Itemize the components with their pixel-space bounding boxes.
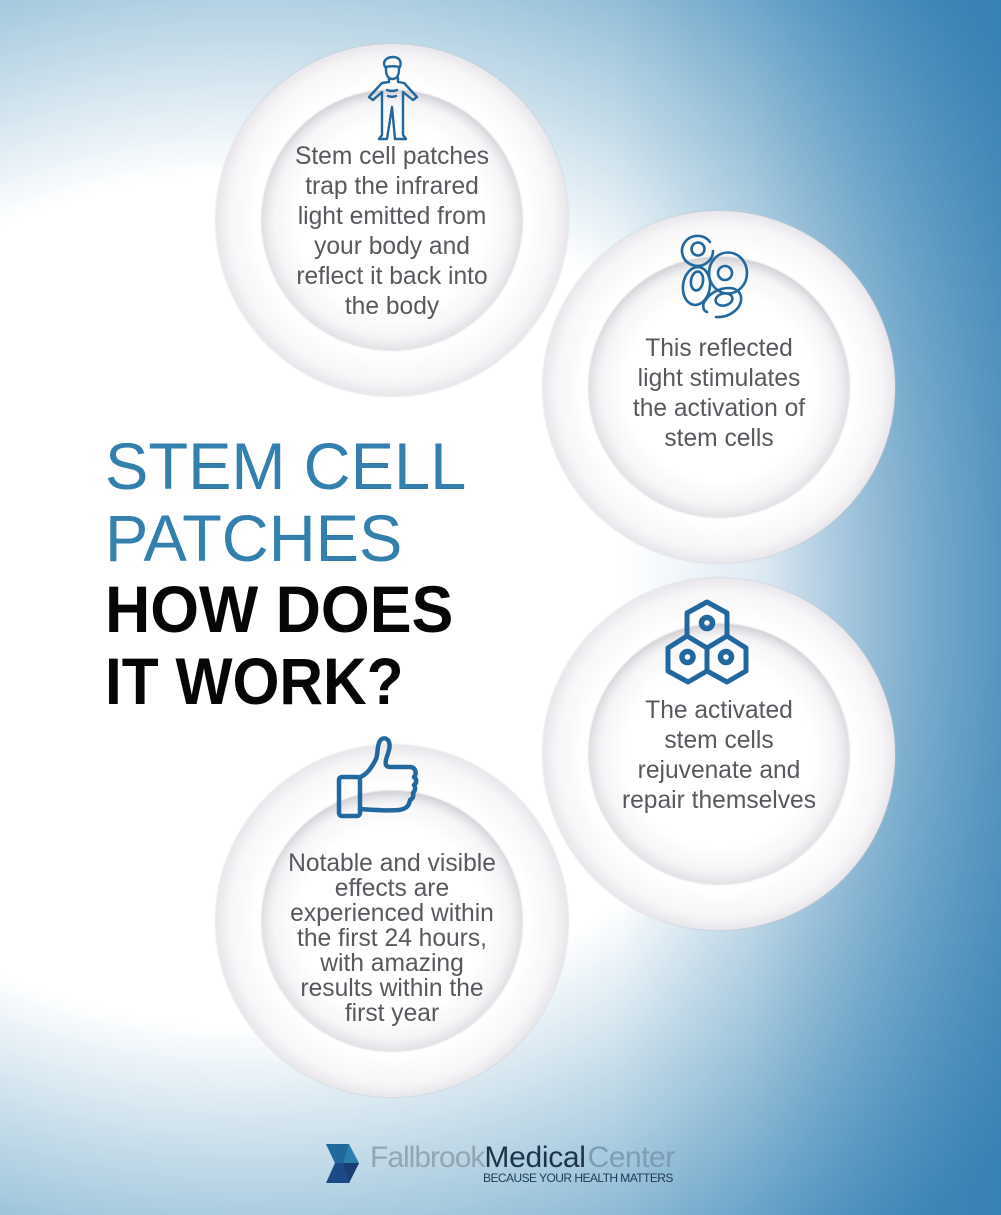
circle: step 3 (543, 578, 895, 930)
icon: person (368, 56, 418, 140)
circle: step 4 (216, 745, 568, 1097)
title: black lines: IT WORK? (105, 644, 404, 718)
step 4 text: experienced within (290, 900, 494, 927)
step 3 text (622, 697, 816, 814)
step 4 text: effects are (335, 875, 449, 902)
step 4 text: Notable and visible (288, 850, 496, 877)
title: black lines: HOW DOES (105, 572, 453, 646)
circle: step 2 (543, 211, 895, 563)
step 3 text: The activated (645, 697, 793, 724)
step 1 text: your body and (314, 233, 470, 260)
step 1 text: the body (345, 293, 439, 320)
step 4 text: first year (345, 1000, 439, 1027)
logo (326, 1141, 675, 1185)
step 1 text: trap the infrared (305, 173, 479, 200)
icon: hexagons (666, 600, 748, 684)
step 4 text: results within the (300, 975, 484, 1002)
step 2 text: This reflected (645, 335, 793, 362)
title (105, 429, 466, 718)
step 3 text: rejuvenate and (638, 757, 800, 784)
logo wordmark: FallbrookMedicalCenter (370, 1141, 675, 1174)
step 1 text (295, 143, 489, 320)
step 4 text (288, 850, 496, 1027)
icon: cells (680, 234, 748, 318)
icon: thumbs up (336, 736, 418, 818)
logo tagline: BECAUSE YOUR HEALTH MATTERS (483, 1171, 673, 1185)
step 2 text: the activation of (633, 395, 805, 422)
step 4 text: with amazing (320, 950, 464, 977)
step 1 text: reflect it back into (296, 263, 488, 290)
step 2 text (633, 335, 806, 452)
step 1 text: light emitted from (298, 203, 486, 230)
title: blue lines (105, 429, 466, 574)
step 3 text: repair themselves (622, 787, 816, 814)
step 4 text: the first 24 hours, (297, 925, 487, 952)
step 3 text: stem cells (664, 727, 774, 754)
step 2 text: light stimulates (638, 365, 800, 392)
step 1 text: Stem cell patches (295, 143, 489, 170)
logo mark (326, 1144, 359, 1183)
circle: step 1 (216, 44, 568, 396)
step 2 text: stem cells (664, 425, 774, 452)
title: blue lines: STEM CELL (105, 429, 466, 503)
title: black lines (105, 572, 453, 718)
title: blue lines: PATCHES (105, 500, 402, 574)
